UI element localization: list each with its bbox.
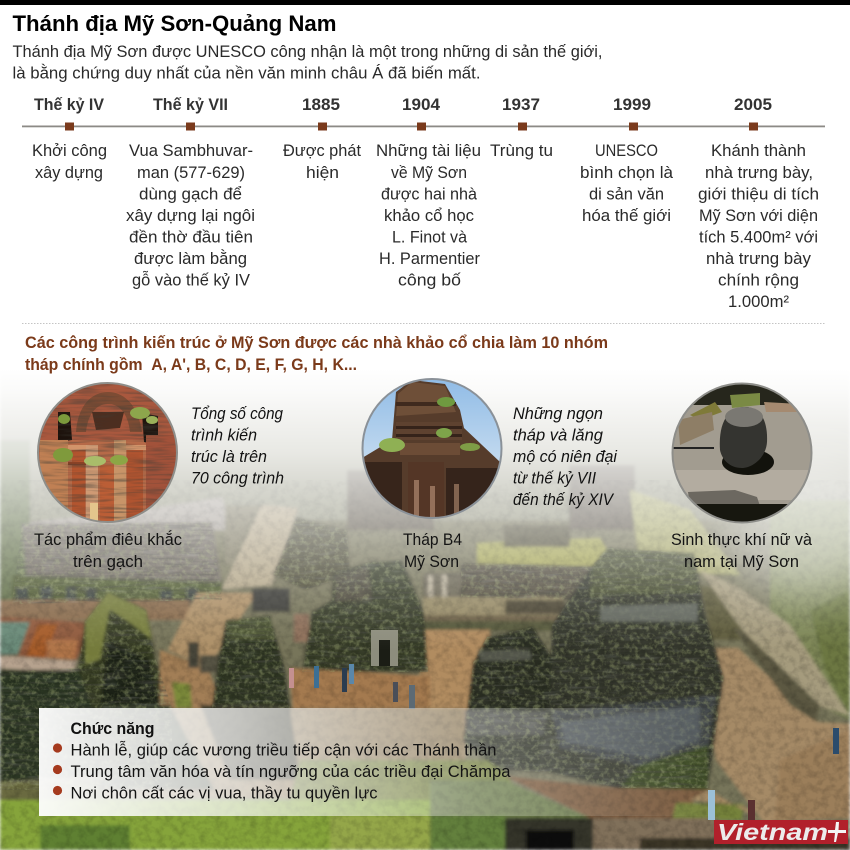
- top black bar: [0, 0, 850, 5]
- timeline entry: 2005: nhà trưng bày: [706, 249, 811, 268]
- timeline entry: 1904: [376, 95, 481, 290]
- timeline entry: Thế kỷ IV: Khởi công: [32, 141, 107, 160]
- caption: brick carving: Tác phẩm điêu khắc: [34, 530, 182, 549]
- timeline entry: 1904: được hai nhà: [381, 184, 478, 204]
- italic note: number of works: trình kiến: [191, 426, 257, 444]
- timeline entry: Thế kỷ VII: đền thờ đầu tiên: [129, 228, 253, 246]
- timeline entry: 1885: hiện: [306, 163, 339, 182]
- timeline entry: 1904: 1904: [402, 95, 441, 114]
- timeline entry: 1904: Những tài liệu: [376, 141, 481, 160]
- italic note: dating: mộ có niên đại: [513, 447, 618, 466]
- timeline markers: [65, 122, 758, 130]
- photo circle: B4 tower: [360, 377, 504, 525]
- timeline entry: 2005: giới thiệu di tích: [698, 184, 819, 204]
- timeline entry: 2005: 2005: [734, 95, 772, 114]
- section heading: tháp chính gồm A, A', B, C, D, E, F, G, H, K...: [25, 356, 357, 374]
- timeline entry: 1999: UNESCO: [595, 141, 658, 160]
- timeline entry: Thế kỷ VII: Vua Sambhuvar-: [129, 141, 253, 160]
- tower stone and moss texture: [0, 520, 724, 790]
- timeline entry: Thế kỷ VII: man (577-629): [137, 163, 245, 182]
- intro text: [12, 42, 602, 82]
- timeline entry: 1904: khảo cổ học: [384, 206, 474, 225]
- italic note: number of works: [191, 404, 284, 488]
- caption: linga: [671, 530, 813, 571]
- italic note: number of works: Tổng số công: [191, 404, 283, 423]
- function item 2: Trung tâm văn hóa và tín ngưỡng của các triều đại Chămpa: [70, 762, 511, 781]
- italic note: number of works: trúc là trên: [191, 447, 267, 466]
- photo circle: brick carving: [36, 381, 180, 525]
- timeline entry: 1999: bình chọn là: [580, 163, 674, 182]
- panel background: [39, 708, 709, 816]
- photo circle: linga and yoni: [670, 381, 814, 526]
- caption: tower B4: Mỹ Sơn: [404, 552, 459, 571]
- white fog fade over photo: [0, 368, 850, 650]
- timeline axis: [22, 126, 825, 127]
- timeline entry: 2005: tích 5.400m² với: [699, 228, 818, 246]
- section heading: Các công trình kiến trúc ở Mỹ Sơn được các nhà khảo cổ chia làm 10 nhóm: [25, 334, 608, 352]
- timeline entry: Thế kỷ VII: xây dựng lại ngôi: [126, 206, 255, 225]
- timeline entry: 2005: Mỹ Sơn với diện: [699, 206, 818, 225]
- section heading: [25, 334, 608, 374]
- timeline entry: Thế kỷ VII: gỗ vào thế kỷ IV: [132, 270, 251, 290]
- timeline entry: Thế kỷ VII: được làm bằng: [134, 249, 247, 268]
- caption: brick carving: [34, 530, 182, 571]
- caption: linga: nam tại Mỹ Sơn: [684, 552, 799, 571]
- italic note: dating: Những ngọn: [513, 404, 603, 423]
- timeline entry: 2005: [698, 95, 819, 311]
- caption: tower B4: [403, 530, 462, 571]
- timeline entry: 1904: L. Finot và: [392, 228, 468, 246]
- timeline entry: 1999: hóa thế giới: [582, 206, 671, 225]
- timeline entry: 1937: Trùng tu: [490, 141, 553, 160]
- visitors: [289, 664, 839, 820]
- timeline entry: 1904: H. Parmentier: [379, 249, 480, 268]
- timeline entry: 1885: Được phát: [283, 141, 361, 160]
- timeline: [22, 95, 825, 311]
- background photo: aerial view of My Son temple ruins: [0, 370, 850, 850]
- italic note: dating: [513, 404, 618, 509]
- panel: functions: [39, 708, 709, 816]
- timeline entry: 2005: nhà trưng bày,: [705, 163, 813, 182]
- caption: linga: Sinh thực khí nữ và: [671, 530, 813, 549]
- timeline entry: Thế kỷ IV: xây dựng: [35, 163, 103, 182]
- logo: Vietnam+: Vietnam: [717, 819, 828, 845]
- timeline entry: 1937: 1937: [502, 95, 540, 114]
- timeline entry: 1999: [580, 95, 674, 225]
- timeline entry: 1904: về Mỹ Sơn: [391, 163, 467, 182]
- caption: tower B4: Tháp B4: [403, 530, 462, 549]
- mottled photo texture: [0, 480, 850, 850]
- timeline entry: 1937: [490, 95, 553, 160]
- timeline entry: 2005: 1.000m²: [728, 292, 789, 311]
- timeline entry: Thế kỷ VII: [126, 95, 255, 290]
- timeline entry: Thế kỷ VII: dùng gạch để: [139, 184, 242, 204]
- timeline entry: 1885: 1885: [302, 95, 340, 114]
- timeline entry: Thế kỷ VII: Thế kỷ VII: [153, 95, 228, 114]
- timeline entry: 1999: di sản văn: [589, 184, 664, 204]
- function item 3: Nơi chôn cất các vị vua, thầy tu quyền lực: [70, 784, 378, 802]
- timeline entry: Thế kỷ IV: [32, 95, 107, 182]
- timeline entry: 2005: Khánh thành: [711, 141, 806, 160]
- italic note: number of works: 70 công trình: [191, 468, 284, 488]
- timeline entry: Thế kỷ IV: Thế kỷ IV: [34, 95, 105, 114]
- tower highlights: [85, 592, 700, 758]
- panel heading: Chức năng: [70, 720, 154, 738]
- timeline entry: 1999: 1999: [613, 95, 651, 114]
- caption: brick carving: trên gạch: [73, 552, 143, 571]
- intro text: là bằng chứng duy nhất của nền văn minh châu Á đã biến mất.: [12, 64, 480, 82]
- italic note: dating: tháp và lăng: [513, 426, 604, 444]
- timeline entry: 1885: [283, 95, 361, 182]
- title: Thánh địa Mỹ Sơn-Quảng Nam: [12, 11, 336, 36]
- intro text: Thánh địa Mỹ Sơn được UNESCO công nhận là một trong những di sản thế giới,: [12, 42, 602, 61]
- doorway: [371, 630, 398, 666]
- timeline entry: 1904: công bố: [398, 270, 462, 290]
- logo: Vietnam+: [714, 819, 848, 845]
- italic note: dating: từ thế kỷ VII: [513, 468, 596, 488]
- function item 1: Hành lễ, giúp các vương triều tiếp cận với các Thánh thần: [70, 740, 496, 760]
- timeline entry: 2005: chính rộng: [718, 270, 799, 290]
- italic note: dating: đến thế kỷ XIV: [513, 490, 614, 509]
